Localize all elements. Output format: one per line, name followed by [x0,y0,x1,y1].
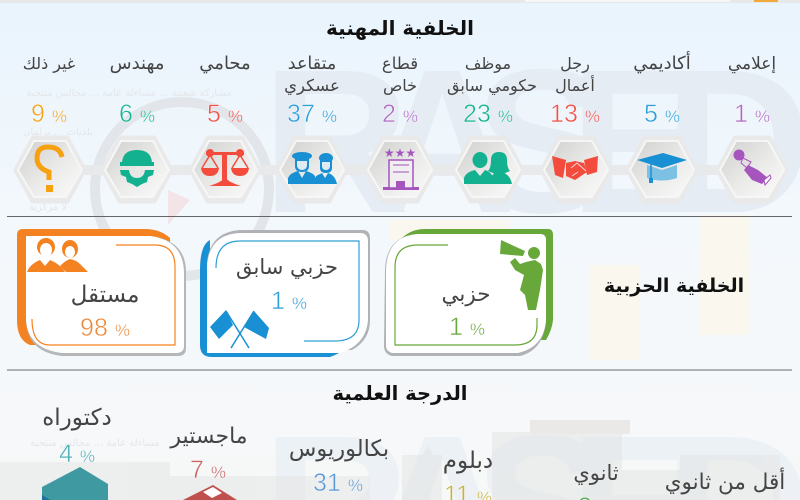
panel: former party member: 1 % [271,287,307,315]
divider bottom [7,369,792,371]
item: doctorate [42,405,112,500]
item: retired military: 37 % [287,100,337,128]
item: secondary: ثانوي [573,461,619,485]
icon: two persons [27,238,88,272]
heading: party background: الخلفية الحزبية [604,275,744,297]
item: below secondary: أقل من ثانوي [665,467,785,495]
watermark: faint slogans [23,88,232,449]
item: businessman: أعمال [555,75,595,95]
item: businessman: 13 % [550,100,600,128]
item: businessman: رجل [560,54,590,74]
item: private sector [382,54,419,190]
watermark: faint slogans: مساءلة عامة ... مجالس منتخبة [30,438,160,449]
panel: independent [17,229,186,356]
item: academic: 5 % [644,100,680,128]
item: diploma [443,448,493,500]
item: master [169,424,248,500]
hexagon chain [16,138,786,201]
item: media: إعلامي [728,54,776,74]
watermark: faint slogans: لا مركزية [29,202,67,213]
panel: party member: حزبي [441,282,491,307]
item: engineer [110,53,164,187]
item: academic [633,51,691,183]
watermark: Arabic letters [390,215,750,360]
watermark: RASED upper: RASED [262,27,800,256]
item: private sector: 2 % [382,100,418,128]
item: private sector: خاص [383,76,417,96]
divider top [7,216,792,218]
item: other: غير ذلك [23,54,75,74]
item: former civil servant [447,54,537,184]
item: former civil servant: موظف [465,54,511,74]
panel: party member [384,229,553,356]
item: master: ماجستير [169,424,248,449]
panel: former party member: حزبي سابق [236,255,338,279]
item: retired military: عسكري [284,76,340,96]
item: doctorate: دكتوراه [42,405,112,431]
item: lawyer: 5 % [207,100,243,128]
title: professional background: الخلفية المهنية [326,16,474,40]
item: lawyer [199,53,251,186]
item: bachelor: 31 % [313,469,363,497]
watermark: faint slogans: مشاركة شعبية ... مساءلة عامة ... مجالس منتخبة [26,88,232,99]
watermark: city skyline [0,420,780,500]
item: secondary [573,461,619,500]
panel: former party member [200,230,370,357]
panel: independent: مستقل [71,282,139,308]
item: retired military [284,54,340,184]
item: former civil servant: حكومي سابق [447,76,537,96]
item: bachelor: بكالوريوس [289,436,389,462]
item: media: 1 % [734,100,770,128]
item: master: 7 % [190,456,226,484]
item: bachelor [289,436,389,497]
item: retired military: متقاعد [288,54,336,74]
item: former civil servant: 23 % [463,100,513,128]
item: businessman [550,54,600,180]
panel: party member: 1 % [449,313,485,341]
item: doctorate: 4 % [59,440,95,468]
item: academic: أكاديمي [633,51,691,74]
item: lawyer: محامي [199,53,251,74]
item: private sector: ★★★ [384,146,416,160]
item: other [23,54,75,192]
item: diploma: دبلوم [443,448,493,474]
item: media [728,54,776,185]
watermark: faint slogans: بلديات ... برلمان [23,127,93,138]
panel: independent: 98 % [80,314,130,342]
item: engineer: مهندس [110,53,164,74]
icon: crossed flags [210,310,269,348]
watermark: logo ring [95,102,269,276]
item: private sector: قطاع [382,54,418,74]
item: engineer: 6 % [119,100,155,128]
icon: man with megaphone [500,240,543,310]
item: other: 9 % [31,100,67,128]
title: academic degree: الدرجة العلمية [332,382,468,405]
